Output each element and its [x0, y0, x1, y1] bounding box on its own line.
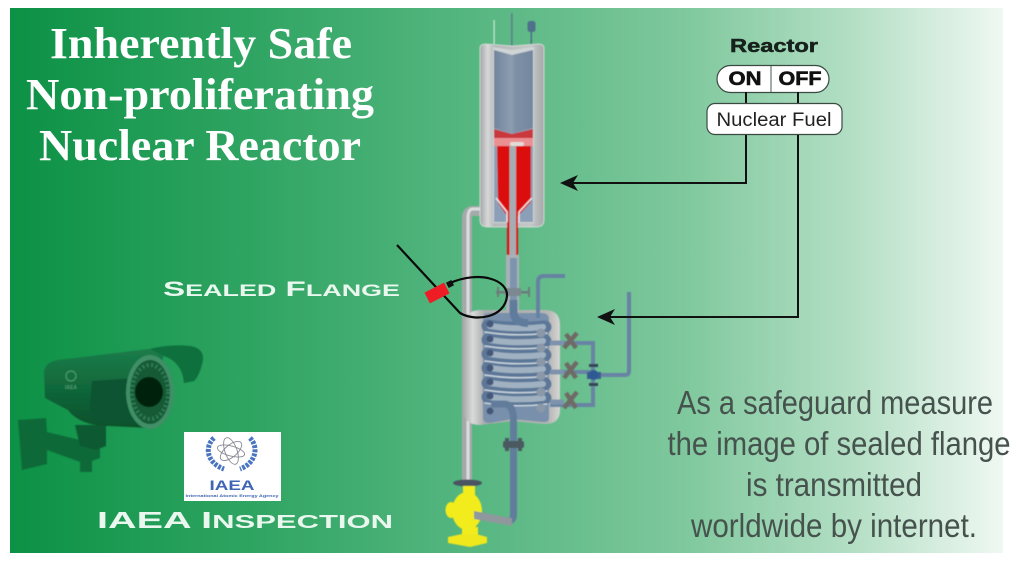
red seal tag — [424, 283, 450, 303]
pink gas layer — [494, 138, 533, 146]
safeguard text: is transmitted — [746, 466, 922, 503]
outlet piping and valves — [550, 292, 629, 408]
yellow pump — [446, 486, 487, 547]
camera logo — [65, 371, 77, 391]
title: Non-proliferating — [26, 70, 374, 119]
left return pipe — [467, 209, 481, 480]
lower flange — [503, 438, 524, 451]
control rods — [494, 13, 536, 51]
heat exchanger tank — [463, 310, 560, 425]
lens ring — [126, 355, 174, 429]
flange seal — [397, 245, 507, 317]
camera body — [44, 347, 165, 428]
lower pipe flange base — [453, 480, 482, 486]
connector lines — [746, 92, 798, 103]
seal wire — [397, 245, 507, 317]
vessel cavity lower — [494, 128, 533, 222]
title — [26, 19, 374, 170]
camera logo: IAEA — [65, 385, 77, 391]
atom — [216, 436, 246, 466]
on off switch: ON — [728, 69, 762, 90]
lower pipe to tank — [506, 255, 519, 312]
safeguard text: worldwide by internet. — [690, 507, 977, 544]
red coolant — [497, 146, 531, 255]
reactor switch diagram — [707, 36, 842, 134]
dark red band — [494, 129, 533, 139]
lens — [135, 377, 163, 407]
title: Inherently Safe — [50, 19, 352, 68]
on off switch — [717, 66, 829, 92]
coil inlet and outlet pipes — [514, 300, 528, 323]
coils — [485, 320, 547, 414]
reactor vessel assembly — [446, 13, 629, 547]
vessel upper chamber — [494, 50, 533, 134]
IAEA logo: International Atomic Energy Agency — [186, 493, 280, 498]
safeguard text — [668, 384, 1010, 544]
nuclear fuel box: Nuclear Fuel — [716, 110, 832, 131]
arrow: reactor on off to reactor vessel — [560, 135, 746, 191]
switch heading: Reactor — [730, 36, 818, 56]
pump discharge — [474, 511, 512, 526]
on off switch: OFF — [778, 69, 822, 90]
vessel shell — [480, 44, 544, 227]
title: Nuclear Reactor — [39, 121, 361, 170]
vent pipe — [538, 276, 565, 318]
icon: security camera — [18, 345, 203, 472]
tank interior — [483, 313, 549, 423]
lens barrel — [90, 378, 136, 424]
lens LED ring — [132, 365, 168, 419]
white liner — [496, 198, 532, 222]
arrow: nuclear fuel to heat exchanger — [597, 135, 798, 325]
sealed flange label: S EALED F LANGE — [163, 278, 400, 301]
IAEA inspection label: IAEA I NSPECTION — [97, 507, 393, 533]
camera neck — [75, 425, 106, 450]
flange — [496, 287, 530, 297]
IAEA logo: IAEA — [210, 477, 254, 493]
sun hood — [150, 345, 203, 383]
vessel cavity outline — [493, 47, 534, 223]
IAEA logo — [184, 432, 281, 501]
laurel wreath — [208, 438, 255, 469]
central tube — [510, 146, 516, 261]
wall bracket — [18, 418, 100, 472]
